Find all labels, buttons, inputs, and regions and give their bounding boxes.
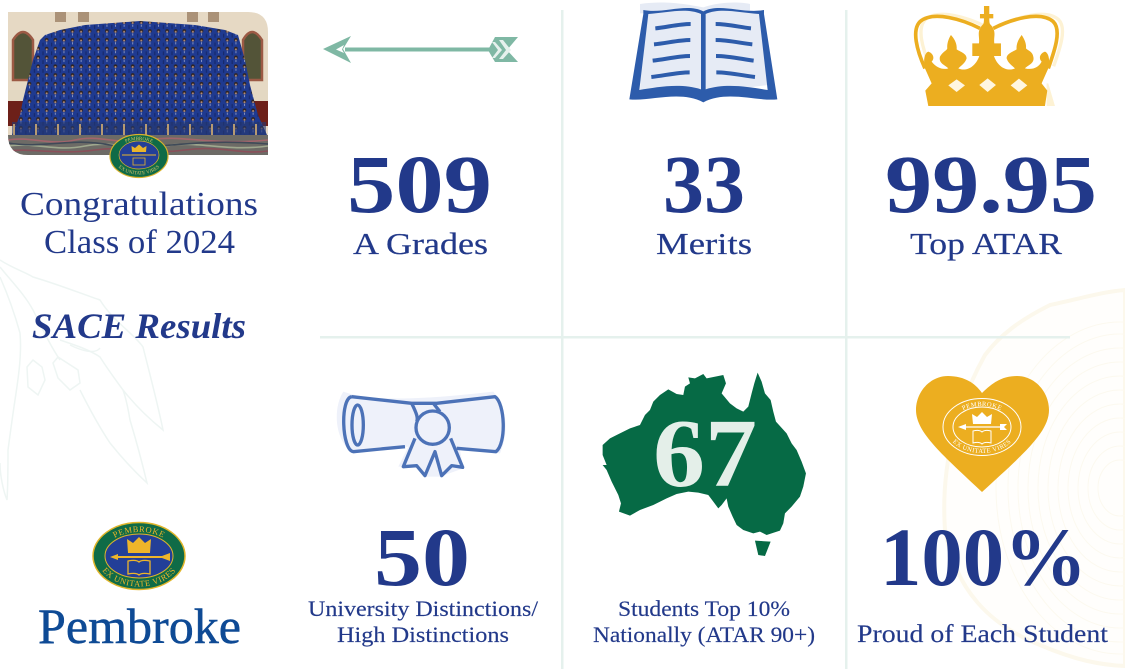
stat: 50 university distinctions: University Distinctions/ — [308, 596, 539, 621]
heading: congratulations — [20, 186, 258, 261]
stat: 99.95 Top ATAR: 99.95 — [885, 138, 1097, 230]
stat: 509 A Grades — [347, 138, 492, 261]
icon: heart with crest: EX UNITATE VIRES — [952, 438, 1010, 453]
icon: heart with crest — [916, 376, 1049, 492]
icon: heart with crest: PEMBROKE — [962, 402, 1002, 410]
stat: 100% proud — [857, 511, 1108, 648]
icon: crown — [916, 6, 1063, 106]
stat: students top 10% — [593, 596, 815, 647]
stat: 509 A Grades: A Grades — [353, 226, 488, 261]
small crest: EX UNITATE VIRES — [118, 164, 160, 174]
stat: 33 Merits: 33 — [663, 138, 745, 230]
icon: Australia map with 67 — [603, 373, 806, 556]
stat: 50 university distinctions: High Distinctions — [337, 622, 509, 647]
stat: 100% proud: Proud of Each Student — [857, 621, 1108, 648]
stat: 50 university distinctions: 50 — [374, 511, 470, 603]
icon: Australia map with 67: 67 — [653, 400, 757, 507]
stat: 33 Merits — [656, 138, 752, 261]
icon: open book — [629, 2, 777, 102]
stat: students top 10%: Nationally (ATAR 90+) — [593, 622, 815, 647]
small crest: PEMBROKE — [124, 136, 154, 143]
background: gum leaf sprig — [0, 260, 163, 500]
heading: congratulations: Class of 2024 — [44, 224, 235, 261]
heading: SACE Results: SACE Results — [32, 306, 246, 346]
stat: 50 university distinctions — [308, 511, 539, 647]
class photo — [8, 12, 268, 155]
small crest — [109, 134, 169, 178]
stat: 99.95 Top ATAR — [885, 138, 1097, 261]
logo crest: EX UNITATE VIRES — [102, 567, 175, 587]
heading: congratulations: Congratulations — [20, 186, 258, 223]
icon: arrow — [323, 36, 518, 63]
stat: 509 A Grades: 509 — [347, 138, 492, 230]
logo crest: PEMBROKE — [112, 526, 165, 538]
stat: students top 10%: Students Top 10% — [618, 596, 790, 621]
logo crest — [92, 522, 186, 590]
icon: diploma scroll — [337, 392, 506, 477]
logo wordmark: Pembroke — [38, 598, 241, 654]
grid dividers — [320, 10, 1070, 669]
stat: 33 Merits: Merits — [656, 226, 752, 261]
stat: 100% proud: 100% — [880, 511, 1087, 603]
background: tree rings — [944, 290, 1125, 666]
stat: 99.95 Top ATAR: Top ATAR — [910, 226, 1062, 261]
